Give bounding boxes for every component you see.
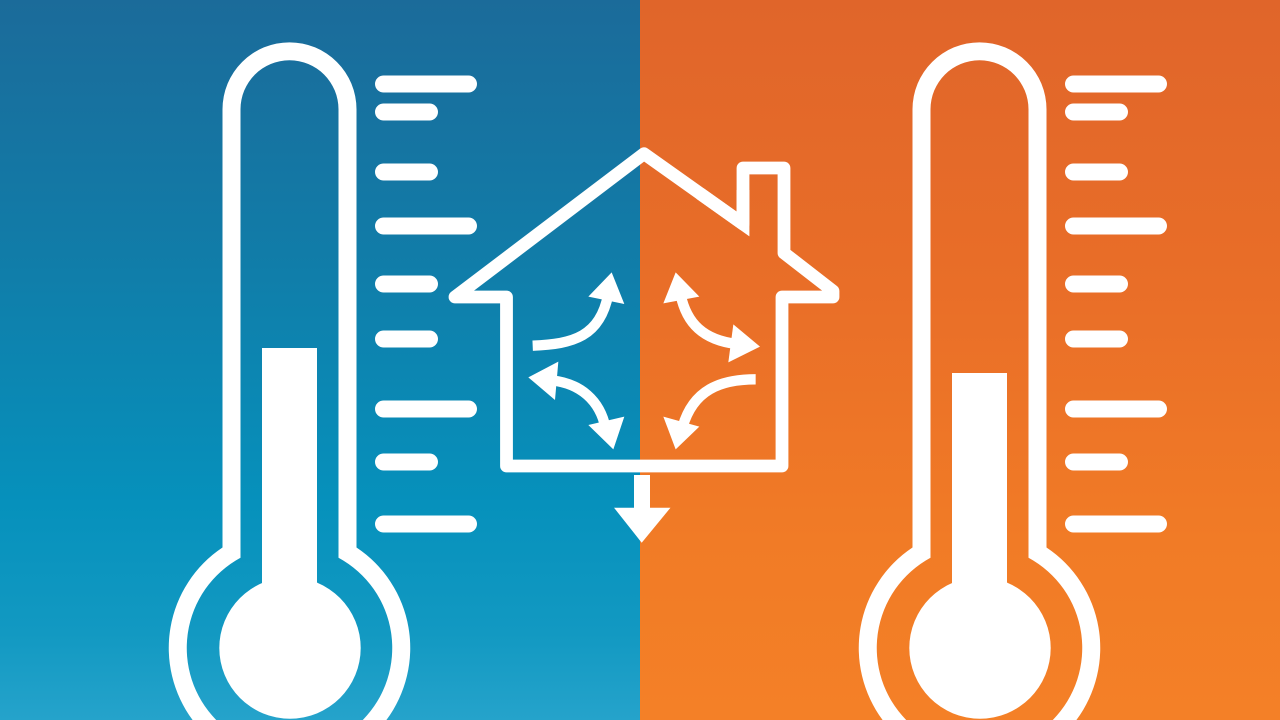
icon: warm thermometer [859,42,1100,720]
arrow: warm side upper double-headed [663,272,760,362]
icon: house outline with chimney [455,154,833,466]
arrows: air movement inside the house [528,272,760,449]
panel: warm orange side [640,0,1280,720]
arrow: warm side lower curved [663,379,756,449]
arrow: cold side upper curved [533,272,624,346]
arrow: downward heat loss through floor [614,475,670,543]
icon: cold thermometer [169,42,410,720]
panel: cold blue side [0,0,640,720]
arrow: cold side lower double-headed [528,362,624,449]
scale: cold thermometer tick marks [375,76,477,532]
scale: warm thermometer tick marks [1065,76,1167,532]
